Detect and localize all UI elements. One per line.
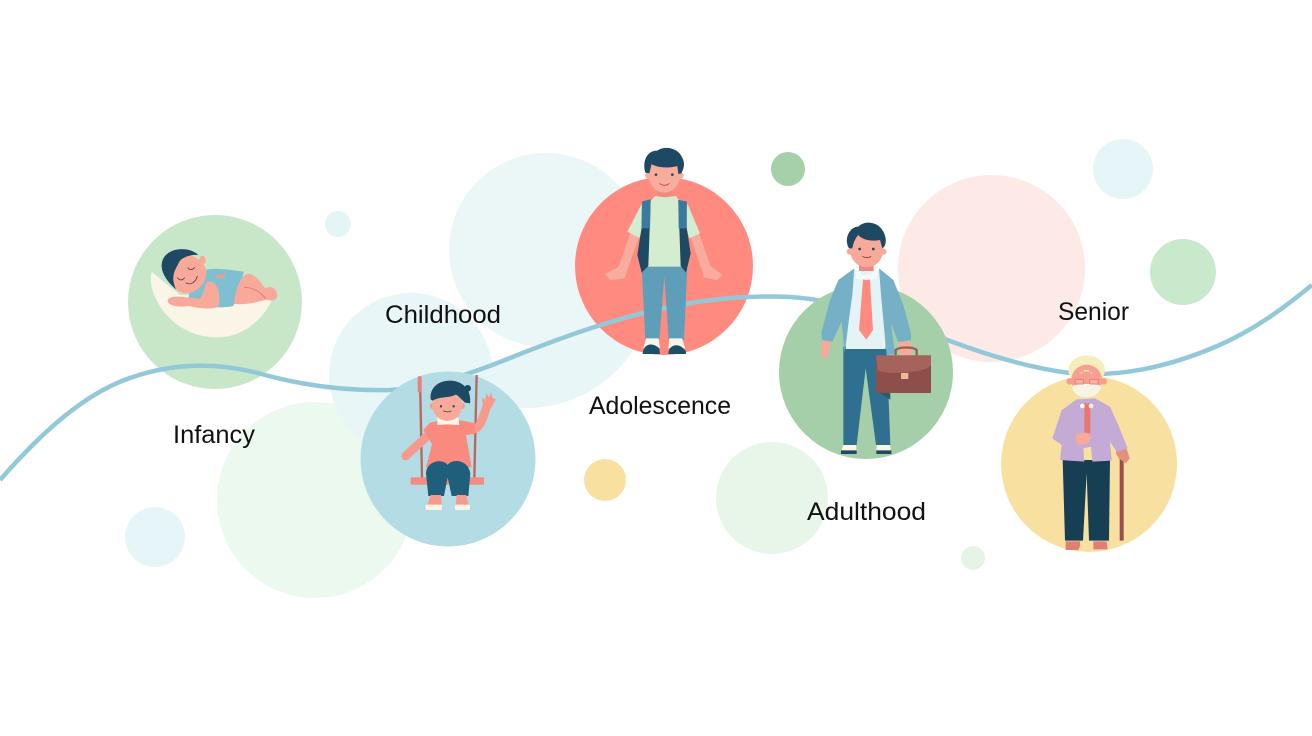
figure: child on swing <box>406 375 496 510</box>
figure: sleeping baby <box>151 249 277 337</box>
cardigan <box>1052 398 1128 462</box>
adolescence circle <box>575 177 753 355</box>
timeline curve <box>0 285 1312 480</box>
figure: senior with cane <box>1052 355 1130 550</box>
label: Adulthood: Adulthood <box>807 498 926 526</box>
adulthood circle <box>779 285 953 459</box>
swing <box>411 375 484 485</box>
label: Adolescence: Adolescence <box>589 392 731 420</box>
label: Infancy: Infancy <box>173 421 256 449</box>
child <box>406 381 496 510</box>
label: Senior: Senior <box>1058 298 1129 326</box>
cradle <box>151 272 272 337</box>
baby body <box>162 249 277 309</box>
cane <box>1116 453 1128 541</box>
figure: adult with briefcase <box>821 223 931 454</box>
life stages infographic <box>0 139 1312 598</box>
infancy circle <box>128 215 302 389</box>
background decorative bubbles <box>125 139 1216 598</box>
jacket <box>822 268 911 355</box>
backpack straps <box>637 199 691 273</box>
briefcase <box>876 347 931 400</box>
senior circle <box>1001 376 1177 552</box>
label: Childhood: Childhood <box>385 301 501 329</box>
head <box>1066 355 1107 397</box>
tie <box>859 276 873 340</box>
figure: teenager with backpack <box>605 148 723 354</box>
childhood circle <box>360 372 536 546</box>
arms <box>605 237 723 280</box>
